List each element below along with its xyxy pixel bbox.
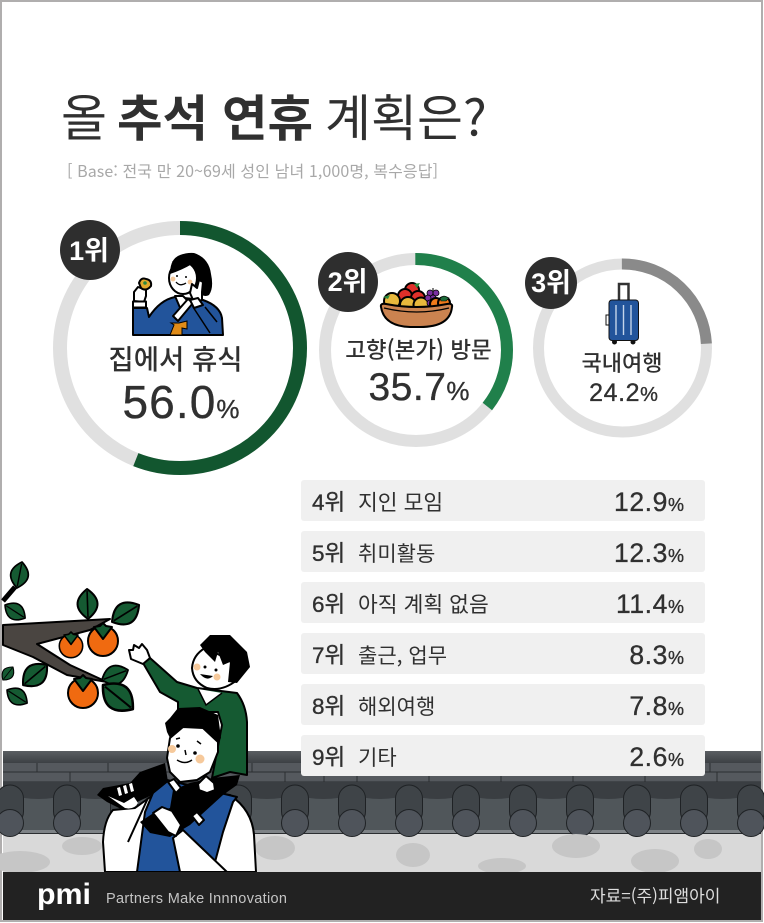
child hand on father: [198, 776, 215, 793]
child legs: [97, 763, 168, 810]
child top: [143, 658, 247, 778]
row: rank 6: 아직 계획 없음: [358, 588, 489, 619]
illustration: stone wall and roof tiles: [0, 751, 764, 874]
rank badge: 1위: [69, 236, 109, 266]
title: 추석 연휴: [117, 80, 313, 151]
panel: rank 3 ring: [525, 257, 706, 432]
rank badge: [318, 252, 378, 312]
row: rank 5: 5위: [312, 541, 345, 566]
ring chart 35.7%: [325, 259, 507, 441]
rank badge: 2위: [328, 267, 367, 297]
source: 자료=(주)피앰아이: [590, 882, 720, 907]
icon: suitcase: [606, 284, 638, 344]
ring chart 56.0%: [60, 228, 300, 468]
rank badge: [60, 220, 120, 280]
tagline: Partners Make Innnovation: [106, 891, 287, 907]
row: rank 7: [301, 633, 705, 674]
row: rank 6: [301, 582, 705, 623]
row: rank 9: 2.6%: [629, 742, 684, 772]
row: rank 4: 지인 모임: [358, 486, 443, 517]
row: rank 4: 12.9%: [614, 487, 684, 517]
row: rank 4: [301, 480, 705, 521]
value: 56.0%: [122, 376, 240, 428]
child head: [192, 648, 237, 689]
row: rank 9: 기타: [358, 742, 397, 772]
panel: rank 1 ring: [60, 220, 300, 468]
label: 집에서 휴식: [108, 337, 243, 377]
title: 계획은?: [325, 79, 487, 151]
value: 24.2%: [589, 379, 658, 407]
label: 고향(본가) 방문: [345, 333, 492, 365]
rank badge: [525, 257, 577, 309]
row: rank 8: 8위: [312, 694, 345, 719]
row: rank 5: [301, 531, 705, 572]
illustration: persimmon tree: [0, 560, 145, 719]
row: rank 8: [301, 684, 705, 725]
footer bar: [3, 872, 761, 920]
row: rank 9: 9위: [312, 745, 345, 770]
rank badge: 3위: [531, 268, 571, 298]
row: rank 5: 취미활동: [358, 538, 435, 568]
icon: fruit bowl: [381, 283, 452, 327]
father arm: [173, 830, 227, 872]
title: 올: [61, 79, 107, 151]
icon: woman in hanbok: [133, 253, 223, 335]
row: rank 4: 4위: [312, 490, 345, 515]
child hand: [129, 644, 150, 664]
row: rank 6: 11.4%: [616, 589, 684, 619]
row: rank 9: [301, 735, 705, 776]
logo: pmi: [37, 878, 91, 911]
row: rank 5: 12.3%: [614, 538, 684, 568]
illustration: father carrying child: [97, 635, 256, 872]
ring chart 24.2%: [538, 264, 706, 432]
father hand: [153, 807, 181, 836]
panel: rank 2 ring: [318, 252, 507, 441]
base note: [ Base: 전국 만 20~69세 성인 남녀 1,000명, 복수응답]: [67, 158, 438, 182]
value: 35.7%: [368, 366, 470, 409]
row: rank 6: 6위: [312, 592, 345, 617]
row: rank 7: 8.3%: [629, 640, 684, 670]
row: rank 8: 7.8%: [629, 691, 684, 721]
father coat: [103, 790, 256, 872]
row: rank 8: 해외여행: [358, 691, 435, 721]
row: rank 7: 출근, 업무: [358, 640, 447, 670]
panel: ranks 4 to 9 list: [301, 480, 705, 776]
label: 국내여행: [582, 346, 662, 378]
row: rank 7: 7위: [312, 643, 345, 668]
father head: [167, 727, 218, 782]
father vest: [137, 780, 237, 872]
